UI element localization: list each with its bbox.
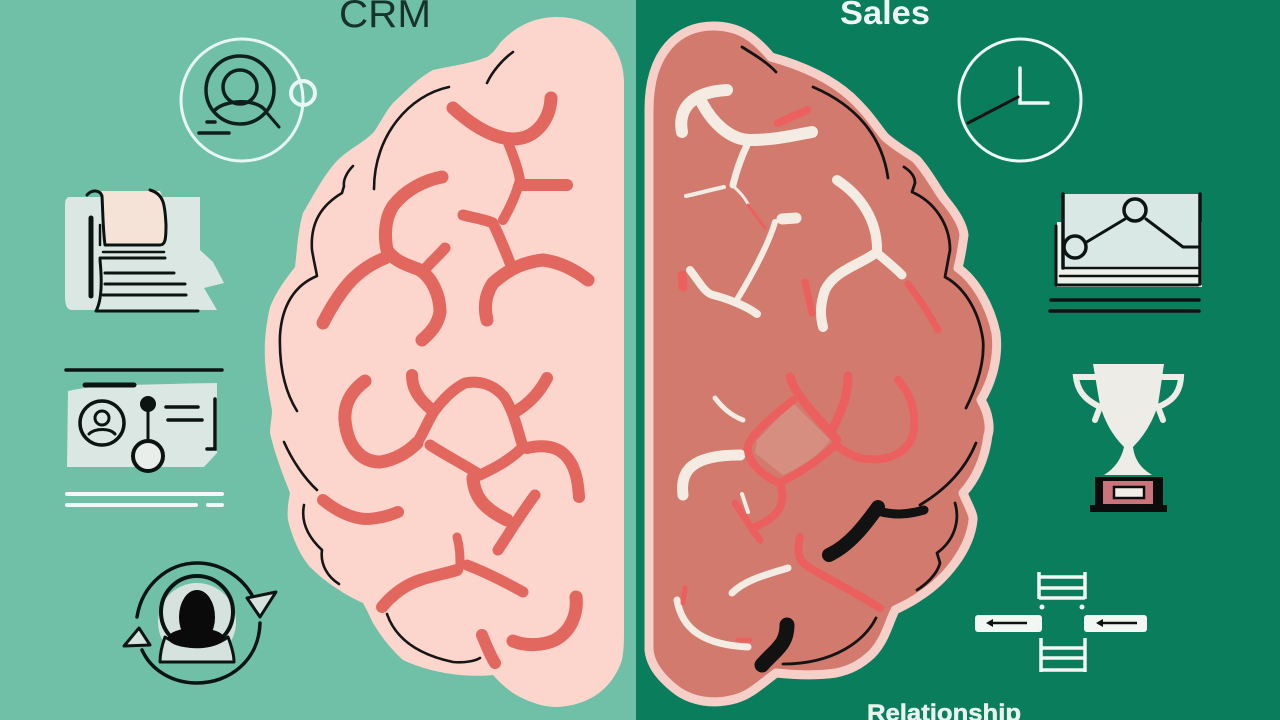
brain: right Sales hemisphere [649,26,997,702]
panel: CRM background [0,0,636,720]
brain folds: coral [323,98,588,663]
icon: customer cycle [124,563,276,683]
icon: trophy [1076,364,1181,512]
icon: line chart [1050,194,1202,311]
icon: relationship connector [975,572,1147,672]
shaded diamond [755,403,830,475]
panel: Sales background [636,0,1280,720]
brain folds: coral red [682,110,938,640]
brain outline strokes [280,52,513,662]
brain folds: cream [677,90,902,647]
icon: document [65,190,224,311]
brain: left CRM hemisphere [265,17,624,707]
thick black strokes [762,507,924,665]
brain outline strokes [742,47,983,664]
icon: user search [181,39,315,161]
icon: profile card [66,370,222,505]
icon: clock [959,39,1081,161]
